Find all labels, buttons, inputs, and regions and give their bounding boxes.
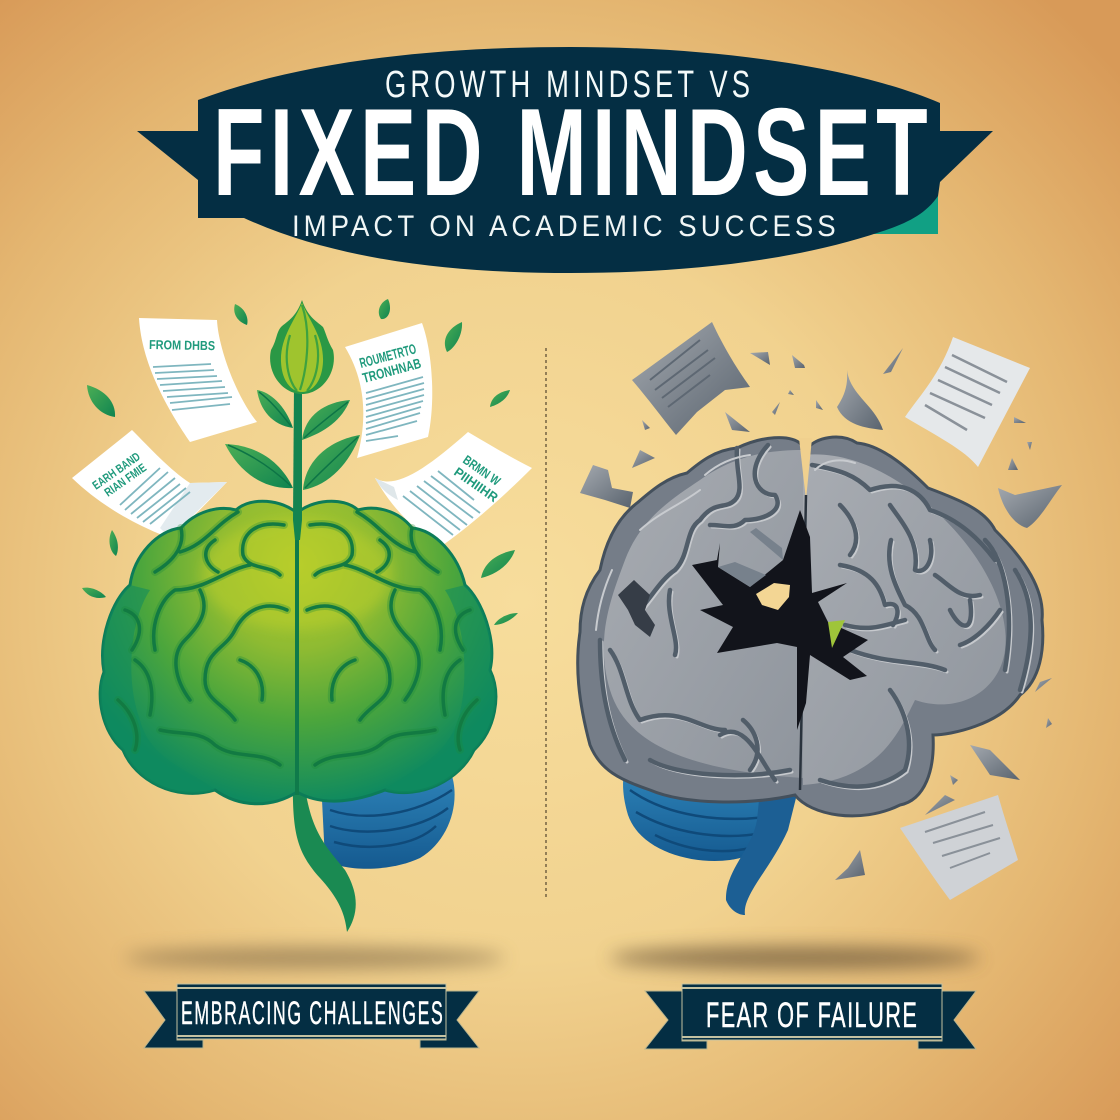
main band: [682, 984, 942, 1040]
brain stem: [726, 790, 798, 915]
cerebellum: [322, 764, 455, 869]
central crack: [692, 510, 868, 730]
paper 3: EARH BAND: [90, 449, 143, 492]
paper 4: PIIHIIHR: [451, 464, 501, 505]
growth brain: [100, 500, 496, 804]
crack hole: [756, 583, 790, 610]
sulci highlights: [602, 447, 1033, 789]
inner highlight: [202, 520, 392, 630]
midline: [295, 500, 299, 795]
paper 4: [375, 432, 532, 547]
ribbon: fear of failure: [645, 984, 976, 1049]
sulci: [600, 445, 1031, 787]
left tail: [144, 991, 203, 1048]
banner shape: [137, 47, 993, 273]
right tail: [918, 991, 976, 1049]
flower bud: [270, 300, 334, 394]
right tail: [420, 991, 479, 1048]
plant leaves: [225, 390, 360, 490]
panel: fixed mindset illustration: [578, 322, 1062, 915]
label: EMBRACING CHALLENGES: [181, 997, 443, 1031]
gray paper 3: [900, 795, 1018, 900]
trim stripes: [177, 988, 446, 1036]
sulci: [118, 512, 477, 765]
paper 2: TRONHNAB: [361, 355, 423, 386]
label: FEAR OF FAILURE: [706, 997, 917, 1035]
left tail: [645, 991, 707, 1049]
paper 2: [345, 323, 432, 458]
shadow: fixed brain: [610, 946, 980, 970]
broken brain: [578, 437, 1043, 816]
brain body: [100, 501, 496, 804]
top notch: [799, 438, 812, 500]
title banner: [137, 47, 993, 273]
paper 2: ROUMETRTO: [358, 340, 418, 371]
title line 1: GROWTH MINDSET VS: [385, 64, 750, 106]
cerebellum: [623, 764, 795, 861]
ribbon: embracing challenges: [144, 984, 479, 1048]
paper 1: [139, 318, 257, 442]
shards: [580, 348, 1062, 880]
paper 4: BRMN W: [460, 452, 504, 489]
side crack: [618, 580, 655, 637]
brain body: [578, 437, 1043, 816]
lobes: [604, 450, 803, 778]
title line 2: FIXED MINDSET: [213, 84, 928, 222]
growing papers: [72, 318, 532, 547]
right lobe: [803, 454, 1006, 785]
gray paper 1: [632, 322, 750, 435]
stem: [293, 770, 356, 932]
paper 1: FROM DHBS: [149, 337, 215, 353]
divider: [545, 348, 547, 898]
panel: growth mindset illustration: [72, 299, 532, 932]
shadow: growth brain: [125, 947, 505, 969]
title line 3: IMPACT ON ACADEMIC SUCCESS: [292, 210, 836, 243]
banner teal accent: [858, 182, 938, 234]
floating leaves: [82, 299, 518, 625]
gray paper 2: [905, 337, 1030, 467]
crack bevel: [718, 528, 783, 587]
crack gem: [828, 620, 845, 648]
paper 3: [72, 430, 227, 538]
trim stripes: [682, 988, 942, 1037]
sulci lines: [118, 512, 477, 765]
paper 3: RIAN FMIE: [102, 460, 149, 499]
main band: [177, 984, 446, 1039]
midline: [800, 495, 806, 790]
light ridges: [596, 455, 855, 630]
broken papers: [580, 322, 1062, 900]
outer lobes: [100, 585, 496, 793]
plant stem: [293, 385, 302, 540]
